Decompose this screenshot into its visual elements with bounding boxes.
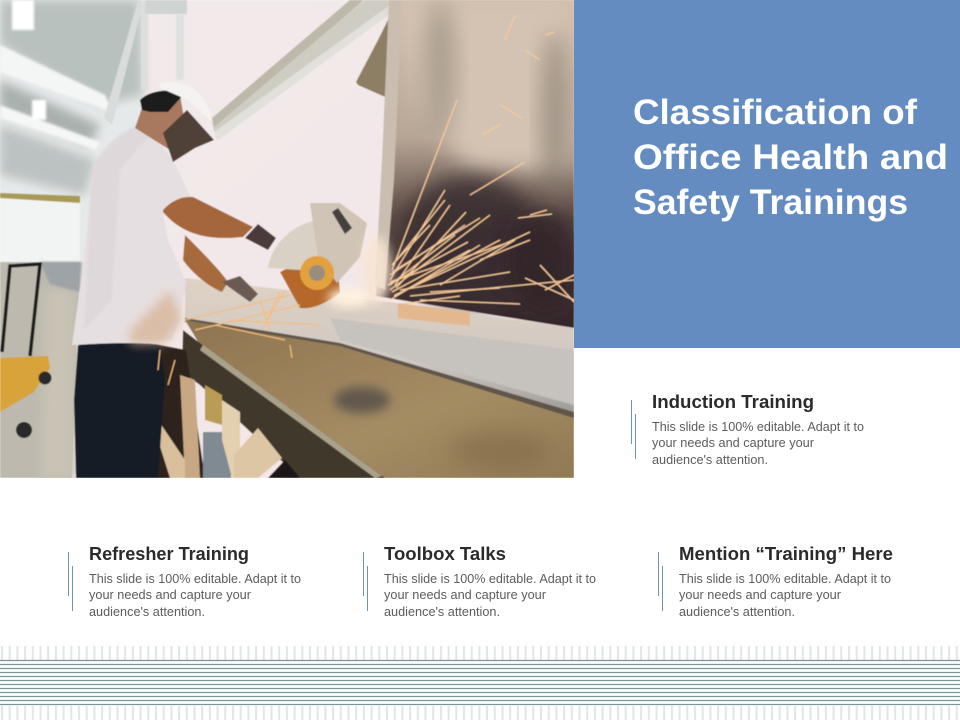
text block: Refresher Training: your needs and capture your <box>89 588 251 602</box>
head <box>135 95 186 150</box>
footer stripe pattern <box>0 646 960 720</box>
text block: Toolbox Talks: This slide is 100% editable. Adapt it to <box>384 572 596 586</box>
title <box>633 92 948 222</box>
text block: Mention Training Here: Mention “Training” Here <box>679 543 893 564</box>
arms <box>163 197 253 238</box>
sparks on the bench <box>158 290 320 385</box>
text block: Refresher Training: This slide is 100% editable. Adapt it to <box>89 572 301 586</box>
title: Safety Trainings <box>633 182 908 222</box>
text block: Induction Training: audience's attention. <box>652 453 768 467</box>
ceiling and far warehouse <box>0 0 187 266</box>
title: Office Health and <box>633 137 948 177</box>
text block: Induction Training <box>632 391 864 467</box>
sparks on curtain <box>388 15 574 305</box>
title panel <box>574 0 960 348</box>
text block: Induction Training: your needs and capture your <box>652 436 814 450</box>
text block: Induction Training: This slide is 100% editable. Adapt it to <box>652 420 864 434</box>
text block: Mention Training Here: your needs and capture your <box>679 588 841 602</box>
wall ducts <box>212 0 392 140</box>
photo: worker cutting metal with sparks <box>0 0 581 478</box>
text block: Toolbox Talks <box>364 543 596 619</box>
trolley <box>0 264 52 438</box>
floor <box>0 262 80 478</box>
worker <box>72 82 276 478</box>
text block: Refresher Training: audience's attention. <box>89 605 205 619</box>
cutting saw <box>268 203 391 308</box>
accent bars <box>68 552 72 611</box>
text block: Mention Training Here <box>658 543 893 619</box>
text block: Toolbox Talks: your needs and capture your <box>384 588 546 602</box>
accent bars <box>658 552 662 611</box>
text block: Induction Training: Induction Training <box>652 391 814 412</box>
text block: Toolbox Talks: Toolbox Talks <box>384 543 506 564</box>
workbench top <box>185 320 574 478</box>
curtain <box>356 0 581 328</box>
text block: Refresher Training <box>68 543 301 619</box>
bench front beam and legs <box>150 330 385 478</box>
accent bars <box>364 552 368 611</box>
title: Classification of <box>633 92 917 132</box>
text block: Toolbox Talks: audience's attention. <box>384 605 500 619</box>
text block: Mention Training Here: This slide is 100% editable. Adapt it to <box>679 572 891 586</box>
text block: Mention Training Here: audience's attention. <box>679 605 795 619</box>
text block: Refresher Training: Refresher Training <box>89 543 249 564</box>
accent bars <box>632 400 636 459</box>
metal rail <box>185 278 574 419</box>
